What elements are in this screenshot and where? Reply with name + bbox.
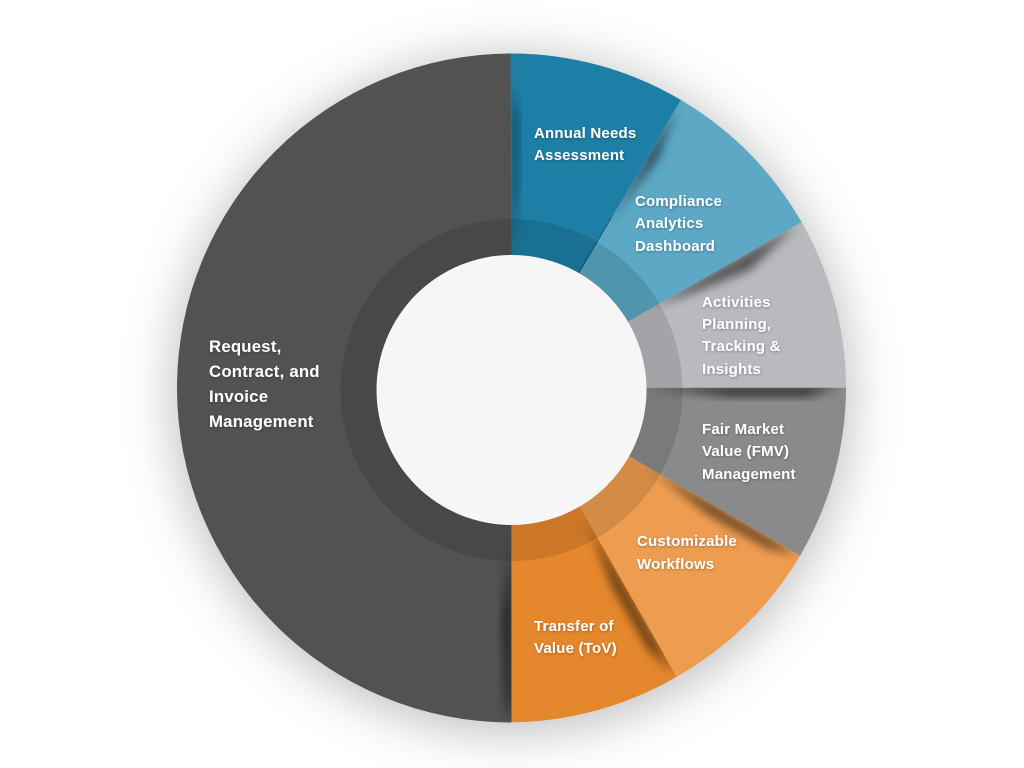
label: Transfer of Value (ToV): Transfer of (534, 618, 615, 635)
label: Request, Contract, and Invoice Management: Contract, and (209, 362, 320, 381)
label: Request, Contract, and Invoice Management: Request, (209, 337, 281, 356)
label: Annual Needs Assessment: Assessment (534, 147, 624, 164)
label: Compliance Analytics Dashboard: Compliance (635, 193, 722, 210)
label: Request, Contract, and Invoice Management: Invoice (209, 387, 268, 406)
label: Customizable Workflows: Workflows (637, 556, 714, 573)
label: Compliance Analytics Dashboard: Dashboard (635, 238, 715, 255)
donut chart (147, 30, 876, 758)
label: Customizable Workflows: Customizable (637, 533, 737, 550)
slice: Transfer of Value (ToV) (512, 506, 677, 722)
center circle (376, 255, 646, 525)
label: Activities Planning, Tracking and Insights: Insights (702, 361, 761, 378)
label: Fair Market Value (FMV) Management: Value (FMV) (702, 443, 789, 460)
label: Request, Contract, and Invoice Management: Management (209, 412, 314, 431)
label: Fair Market Value (FMV) Management: Fair Market (702, 421, 784, 438)
slice: Request, Contract, and Invoice Management (177, 54, 512, 722)
inner translucent ring (340, 219, 682, 561)
label: Transfer of Value (ToV): Value (ToV) (534, 640, 617, 657)
slice: Activities Planning, Tracking and Insights (628, 222, 846, 388)
slice: Customizable Workflows (580, 456, 800, 677)
slice: Compliance Analytics Dashboard (580, 100, 802, 322)
label: Activities Planning, Tracking and Insights: Tracking & (702, 338, 781, 355)
label: Compliance Analytics Dashboard: Analytics (635, 215, 704, 232)
label: Activities Planning, Tracking and Insights: Activities (702, 294, 771, 311)
outer soft shadow (176, 58, 848, 730)
slice: Annual Needs Assessment (510, 54, 681, 274)
label: Annual Needs Assessment: Annual Needs (534, 125, 636, 142)
label: Activities Planning, Tracking and Insights: Planning, (702, 316, 771, 333)
label: Fair Market Value (FMV) Management: Management (702, 466, 796, 483)
slice: Fair Market Value (FMV) Management (629, 388, 846, 556)
